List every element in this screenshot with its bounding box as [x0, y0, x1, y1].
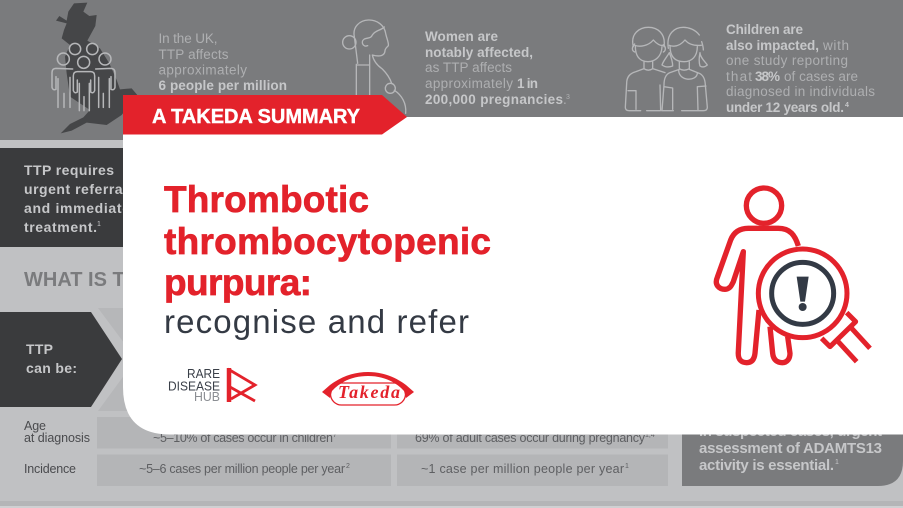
title: Thrombotic — [164, 179, 369, 220]
logo: Takeda — [322, 372, 414, 405]
title: purpura: — [164, 262, 312, 303]
logo: Rare Disease Hub: RARE — [187, 367, 220, 381]
logo: Rare Disease Hub — [168, 367, 255, 404]
arrow: TTP can be — [0, 312, 122, 407]
arrow: TTP can be: TTP — [26, 341, 53, 357]
text: UK prevalence: 6 people per million — [158, 78, 287, 93]
text: children statistic: 38% — [755, 69, 780, 84]
table: age at diagnosis row: 69% of adult cases occur during pregnancy — [415, 431, 646, 445]
callout: ADAMTS13 assessment: 1 — [835, 459, 839, 466]
text: women statistic: . — [563, 92, 567, 107]
text: women statistic: notably affected, — [425, 45, 533, 60]
footer strip — [0, 501, 903, 508]
text: UK prevalence: approximately — [158, 62, 247, 78]
icon: person with magnifying glass — [716, 188, 870, 363]
text: UK prevalence: TTP affects — [158, 47, 229, 62]
icon: two children — [625, 27, 707, 111]
text: women statistic: 1 in — [517, 76, 538, 91]
panel: top statistics band — [0, 0, 903, 140]
table: age at diagnosis row: Age — [24, 419, 46, 433]
ribbon: A Takeda summary: A TAKEDA SUMMARY — [152, 106, 361, 128]
callout: ADAMTS13 assessment: In suspected cases, urgent — [699, 423, 882, 440]
text: women statistic: 3 — [566, 94, 570, 101]
text: women statistic: 200,000 pregnancies — [425, 92, 563, 107]
text: women statistic — [425, 29, 570, 107]
text: urgent referral — [24, 162, 130, 235]
text: children statistic: 4 — [845, 102, 849, 109]
text: UK prevalence: In the UK, — [158, 31, 218, 46]
text: children statistic: under 12 years old. — [726, 100, 844, 115]
ribbon: A Takeda summary — [123, 95, 407, 134]
title: thrombocytopenic — [164, 221, 491, 262]
text: children statistic — [726, 22, 875, 115]
logo: Rare Disease Hub: DISEASE — [168, 380, 220, 394]
text: women statistic: as TTP affects — [425, 60, 512, 75]
text: women statistic: approximately — [425, 76, 513, 91]
icon: UK map with people — [52, 3, 137, 133]
table: incidence row: 1 — [625, 463, 629, 470]
table: age at diagnosis row: ~5–10% of cases occur in children — [153, 431, 333, 445]
text: urgent referral: 1 — [97, 221, 101, 228]
table: age at diagnosis row: at diagnosis — [24, 431, 90, 445]
callout: ADAMTS13 assessment: assessment of ADAMTS13 — [699, 440, 882, 457]
heading: what is TTP: WHAT IS TTP? — [24, 269, 162, 291]
text: urgent referral: and immediate — [24, 200, 130, 216]
text: UK prevalence — [158, 31, 287, 93]
text: children statistic: diagnosed in individuals — [726, 84, 875, 99]
panel: TTP forms row — [0, 308, 200, 411]
callout: ADAMTS13 assessment — [682, 410, 903, 486]
logo: Rare Disease Hub: HUB — [194, 390, 220, 404]
table: incidence row: ~5–6 cases per million people per year — [139, 462, 345, 476]
text: children statistic: of cases are — [784, 69, 858, 84]
text: children statistic: with — [822, 38, 849, 53]
text: children statistic: one study reporting — [726, 53, 848, 68]
title — [164, 179, 491, 340]
callout: ADAMTS13 assessment: activity is essential. — [699, 457, 834, 474]
table: incidence row: Incidence — [24, 462, 76, 476]
text: children statistic: Children are — [726, 22, 803, 37]
table: age at diagnosis row: 1,4 — [645, 432, 655, 439]
table: incidence row: ~1 case per million people per year — [421, 462, 624, 476]
text: urgent referral: urgent referral — [24, 181, 127, 197]
icon: pregnant woman — [343, 20, 406, 113]
logo: Takeda: Takeda — [338, 382, 400, 402]
title: recognise and refer — [164, 303, 469, 340]
text: women statistic: Women are — [425, 29, 498, 44]
text: children statistic: also impacted, — [726, 38, 819, 53]
table: age at diagnosis row: 7 — [333, 432, 337, 439]
text: children statistic: that — [726, 69, 752, 84]
table: incidence row: 2 — [346, 463, 350, 470]
table: age at diagnosis row — [24, 417, 668, 448]
panel: white summary card — [123, 95, 903, 434]
panel: urgent referral banner — [0, 148, 903, 247]
table: incidence row — [24, 454, 668, 486]
text: urgent referral: TTP requires — [24, 162, 114, 178]
arrow: TTP can be: can be: — [26, 360, 77, 376]
text: urgent referral: treatment. — [24, 219, 97, 235]
